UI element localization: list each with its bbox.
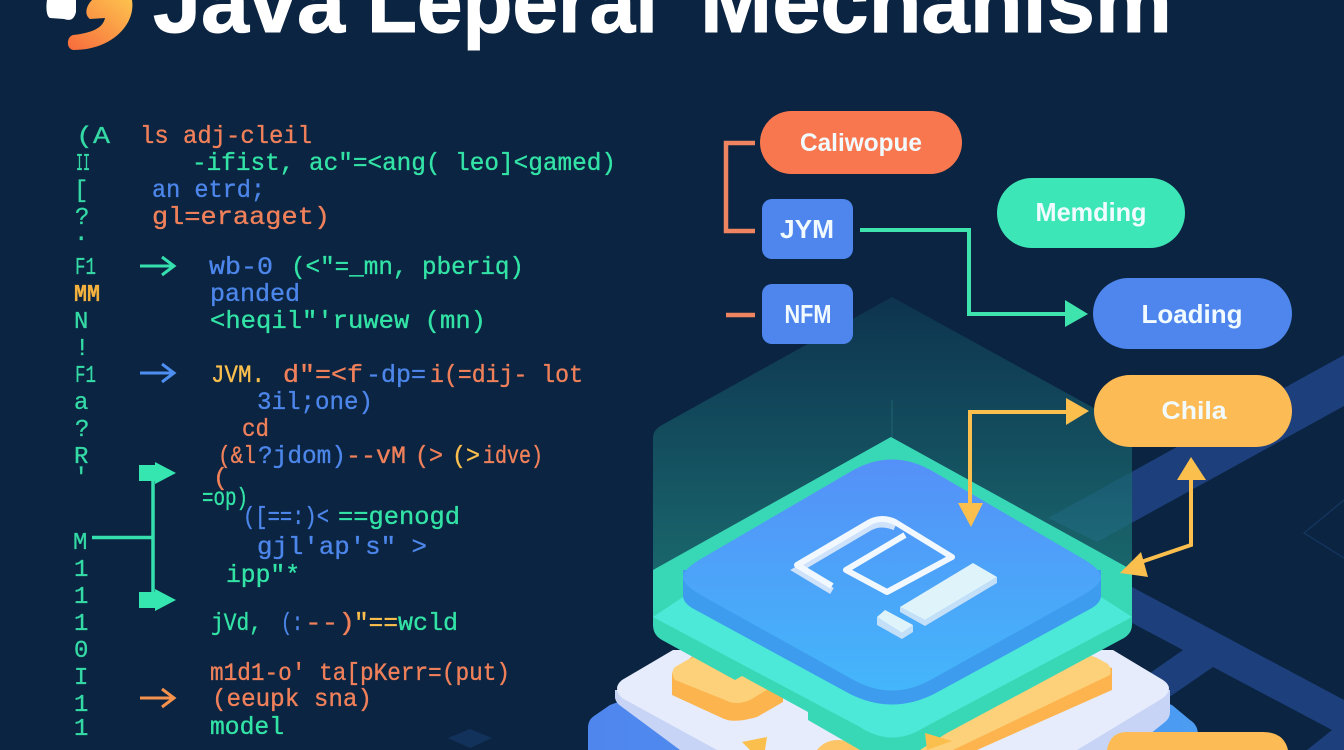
line number column: 1 xyxy=(74,557,88,584)
connector: orange bracket xyxy=(726,143,755,231)
line number column xyxy=(73,124,111,743)
code listing: (> xyxy=(452,442,480,471)
pill: Loading: Loading xyxy=(1142,299,1242,329)
code listing: --vM xyxy=(346,442,406,471)
code listing: wb-0 xyxy=(209,253,273,282)
pill: Child xyxy=(1094,375,1292,447)
line number column: 1 xyxy=(74,611,88,638)
code listing: <heqil"'ruwew (mn) xyxy=(210,307,486,336)
code listing: -ifist, ac"=<ang( leo]<gamed) xyxy=(192,149,616,178)
code listing: model xyxy=(210,713,284,742)
box: JYM xyxy=(762,199,853,259)
line number column: 1 xyxy=(74,692,88,719)
pill: Memding: Memding xyxy=(1036,197,1146,227)
code listing: d"=<f xyxy=(283,361,363,390)
code listing: m1d1-o' ta[pKerr=(put) xyxy=(210,659,510,688)
code listing: (: xyxy=(281,609,303,638)
code listing: idve) xyxy=(483,442,543,471)
code listing: cd xyxy=(242,415,269,444)
code listing: =op) xyxy=(202,484,248,513)
line number column: R xyxy=(74,444,88,471)
code listing: gjl'ap's" > xyxy=(257,533,427,562)
code listing: ([==:)< xyxy=(243,503,329,532)
code listing: "== xyxy=(354,609,398,638)
line number column: 1 xyxy=(74,584,88,611)
code listing xyxy=(140,122,616,742)
orange pads xyxy=(672,640,1112,750)
blue base layer xyxy=(588,600,1198,750)
code listing: (&l xyxy=(218,442,256,471)
code listing: (eeupk sna) xyxy=(212,685,372,714)
bracket arrows xyxy=(92,462,176,611)
line number column: F1 xyxy=(75,363,96,390)
code listing: 3il;one) xyxy=(257,388,373,417)
pill: Caliwopue xyxy=(760,111,962,174)
arrow: blue code arrow xyxy=(140,364,174,382)
code listing: ipp"* xyxy=(226,561,300,590)
code listing: jVd, xyxy=(211,609,262,638)
line number column: ' xyxy=(74,465,88,492)
line number column: ! xyxy=(75,336,89,363)
background circuit bands xyxy=(448,355,1344,750)
code listing: panded xyxy=(210,280,300,309)
line number column: MM xyxy=(74,282,100,309)
arrow: green code arrow xyxy=(140,257,174,275)
line number column: (A xyxy=(76,124,111,151)
line number column: 0 xyxy=(74,638,88,665)
line number column: I xyxy=(74,665,88,692)
line number column: F1 xyxy=(75,255,96,282)
ghost translucent volume xyxy=(653,297,1132,580)
line number column: ? xyxy=(75,205,89,232)
line number column: . xyxy=(74,221,88,248)
small arrowheads at base xyxy=(742,733,952,750)
code listing: an etrd; xyxy=(152,176,265,205)
code listing: wcld xyxy=(398,609,458,638)
code listing: (<"=_mn, pberiq) xyxy=(291,253,524,282)
line number column: a xyxy=(74,390,88,417)
isometric stack xyxy=(588,437,1198,750)
arrow: orange code arrow xyxy=(140,689,174,707)
pill: Loading xyxy=(1093,278,1292,349)
connector: orange dash xyxy=(726,313,755,317)
code listing: gl=eraaget) xyxy=(152,203,330,232)
line number column: M xyxy=(73,530,87,557)
code listing: JVM. xyxy=(211,361,265,390)
code listing: ls adj-cleil xyxy=(140,122,312,151)
green plate xyxy=(653,437,1132,750)
icon: chip glyph xyxy=(797,519,997,639)
line number column: [ xyxy=(74,178,88,205)
code listing: ( xyxy=(213,464,228,493)
blue plate xyxy=(683,460,1101,704)
code listing: i(=dij- lot xyxy=(430,361,583,390)
arrow: yellow from Child to plate xyxy=(1120,457,1206,577)
line number column: ? xyxy=(75,417,89,444)
line number column: N xyxy=(74,309,88,336)
line number column: II xyxy=(76,151,90,178)
title xyxy=(153,0,1172,51)
box: JYM: JYM xyxy=(780,214,834,244)
box: NFM xyxy=(762,284,853,344)
logo icon xyxy=(46,0,132,50)
code listing: --) xyxy=(305,609,355,638)
code listing: -dp= xyxy=(366,361,426,390)
pill: Caliwopue: Caliwopue xyxy=(800,129,922,157)
pill: Child: Chila xyxy=(1162,397,1228,425)
code listing: ==genogd xyxy=(338,503,460,532)
code listing: ?jdom) xyxy=(258,442,346,471)
arrow: yellow to Child and down xyxy=(958,398,1089,527)
pill: Memding xyxy=(997,178,1185,248)
box: NFM: NFM xyxy=(784,299,832,329)
pill: bottom orange xyxy=(1107,732,1288,750)
line number column: 1 xyxy=(74,716,88,743)
white layer xyxy=(615,650,1170,750)
code listing: (> xyxy=(415,442,443,471)
arrow: green JVM to Loading xyxy=(860,230,1088,327)
